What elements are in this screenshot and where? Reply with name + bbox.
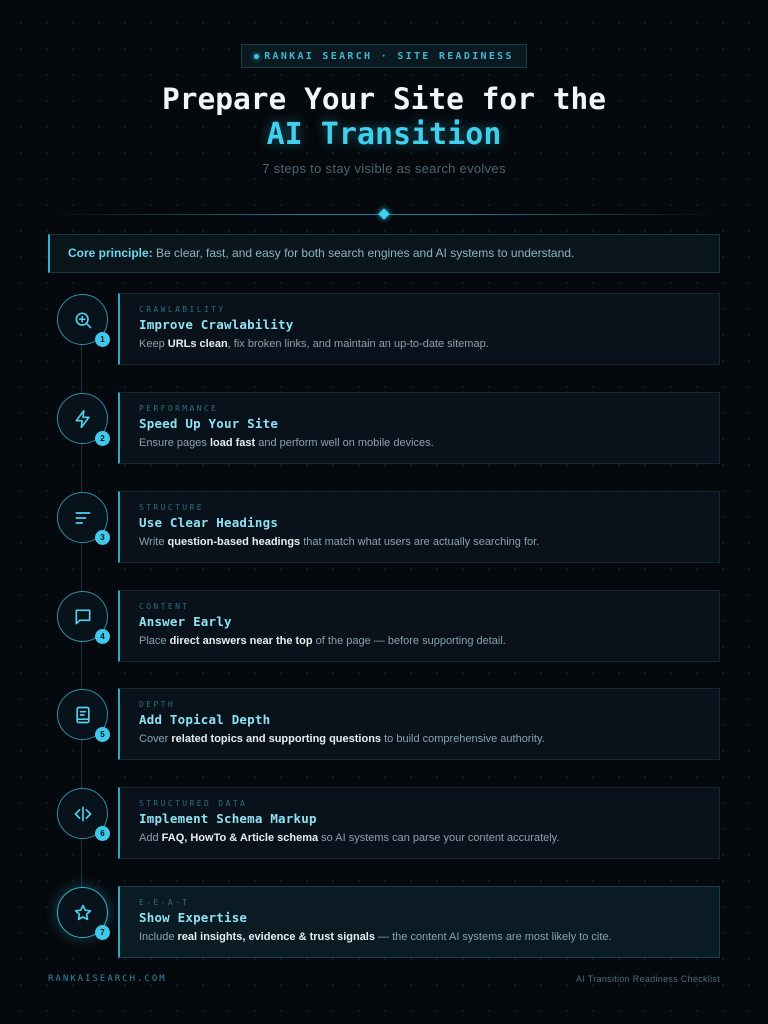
panel: step 3: STRUCTURE xyxy=(139,503,204,512)
panel: step 2: PERFORMANCE xyxy=(139,404,218,413)
step 6 badge: 6 xyxy=(100,829,105,838)
footer right: AI Transition Readiness Checklist xyxy=(576,974,720,984)
step 5 icon xyxy=(57,689,108,740)
step 4 badge xyxy=(95,629,110,644)
footer left: RANKAISEARCH.COM xyxy=(48,974,167,984)
panel: step 7 xyxy=(118,886,720,958)
step 5 badge: 5 xyxy=(100,730,105,739)
panel: step 7: Show Expertise xyxy=(139,910,247,925)
panel: step 1: CRAWLABILITY xyxy=(139,305,226,314)
title line 1: Prepare Your Site for the xyxy=(162,82,606,116)
step 7 icon xyxy=(57,887,108,938)
panel: step 2: Ensure pages load fast and perform well on mobile devices. xyxy=(139,437,434,449)
panel: step 5 xyxy=(118,688,720,760)
step 4 badge: 4 xyxy=(100,632,105,641)
panel: step 1 xyxy=(118,293,720,365)
panel: step 3 xyxy=(118,491,720,563)
panel: step 1: Keep URLs clean, fix broken links, and maintain an up-to-date sitemap. xyxy=(139,338,489,350)
panel: step 6 xyxy=(118,787,720,859)
callout: core principle: Core principle: Be clear, fast, and easy for both search engines and AI systems to understand. xyxy=(68,246,574,260)
panel: step 1: Improve Crawlability xyxy=(139,317,294,332)
subtitle: 7 steps to stay visible as search evolves xyxy=(262,161,506,176)
panel: step 5: DEPTH xyxy=(139,700,175,709)
panel: step 4: Answer Early xyxy=(139,614,232,629)
panel: step 4: CONTENT xyxy=(139,602,190,611)
step 1 badge xyxy=(95,332,110,347)
callout: core principle xyxy=(48,234,720,273)
step 7 badge xyxy=(95,925,110,940)
panel: step 7: Include real insights, evidence & trust signals — the content AI systems are most likely to cite. xyxy=(139,931,612,943)
tag: brand label: RANKAI SEARCH · SITE READINESS xyxy=(264,50,514,62)
step 1 badge: 1 xyxy=(100,335,105,344)
panel: step 5: Add Topical Depth xyxy=(139,712,270,727)
panel: step 7: E-E-A-T xyxy=(139,898,190,907)
title line 2: AI Transition xyxy=(267,117,501,152)
step 6 icon xyxy=(57,788,108,839)
step 3 badge xyxy=(95,530,110,545)
panel: step 3: Write question-based headings that match what users are actually searching for. xyxy=(139,536,539,548)
panel: step 2: Speed Up Your Site xyxy=(139,416,278,431)
panel: step 6: Add FAQ, HowTo & Article schema so AI systems can parse your content accurately. xyxy=(139,832,559,844)
icon: diamond divider xyxy=(378,208,390,220)
panel: step 3: Use Clear Headings xyxy=(139,515,278,530)
step 4 icon xyxy=(57,591,108,642)
step 3 badge: 3 xyxy=(100,533,105,542)
step 2 badge xyxy=(95,431,110,446)
panel: step 2 xyxy=(118,392,720,464)
panel: step 4: Place direct answers near the top of the page — before supporting detail. xyxy=(139,635,506,647)
step 2 icon xyxy=(57,393,108,444)
tag: brand label xyxy=(241,44,527,68)
panel: step 6: STRUCTURED DATA xyxy=(139,799,247,808)
panel: step 6: Implement Schema Markup xyxy=(139,811,317,826)
step 7 badge: 7 xyxy=(100,928,105,937)
step 6 badge xyxy=(95,826,110,841)
step 2 badge: 2 xyxy=(100,434,105,443)
panel: step 5: Cover related topics and supporting questions to build comprehensive authority. xyxy=(139,733,545,745)
step 1 icon xyxy=(57,294,108,345)
step 5 badge xyxy=(95,727,110,742)
step 3 icon xyxy=(57,492,108,543)
panel: step 4 xyxy=(118,590,720,662)
